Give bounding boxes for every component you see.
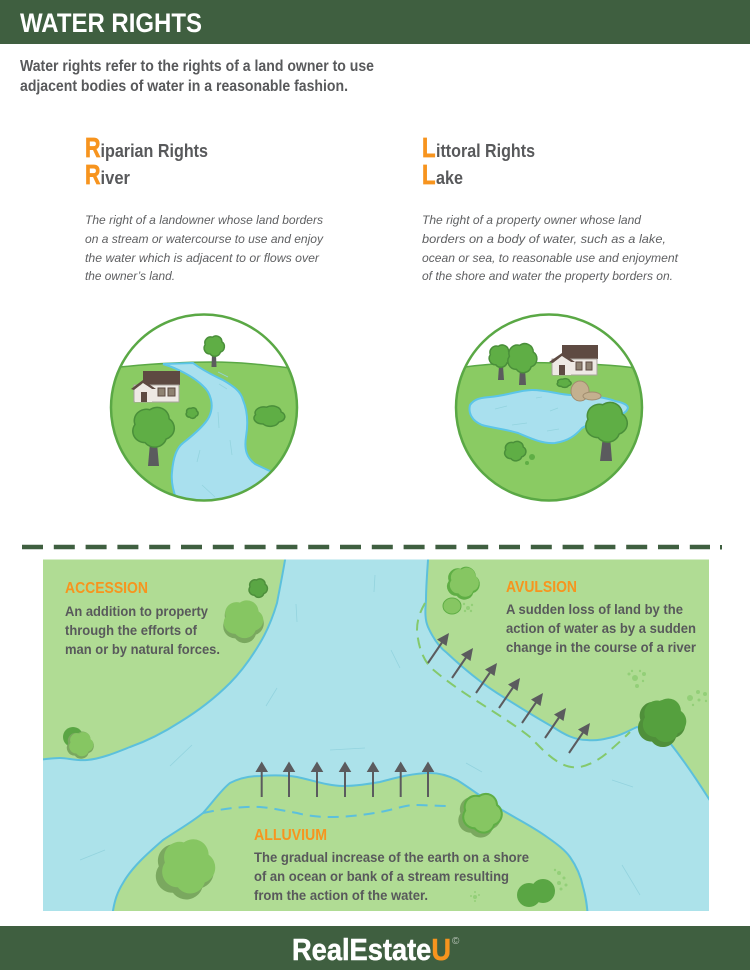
footer banner [0, 926, 750, 970]
littoral definition [422, 213, 679, 283]
littoral definition: of the shore and water the property borders on. [422, 269, 673, 283]
intro text [20, 58, 374, 95]
tree: hill [204, 336, 224, 367]
intro text: Water rights refer to the rights of a land owner to use [20, 58, 374, 75]
label: alluvium [254, 827, 529, 903]
tree: back centre [508, 344, 537, 385]
heading: littoral rights: L [422, 132, 436, 163]
label: alluvium: The gradual increase of the earth on a shore [254, 849, 529, 865]
label: accession [65, 580, 220, 657]
lake [470, 390, 628, 443]
bush: right [254, 406, 285, 426]
littoral definition: ocean or sea, to reasonable use and enjoyment [422, 251, 679, 265]
header banner [0, 0, 750, 44]
label: accession: man or by natural forces. [65, 641, 220, 657]
heading: riparian rights: iver [100, 168, 130, 188]
tree: avulsion top [443, 567, 480, 614]
heading: riparian rights: R [85, 159, 100, 190]
tree: back left [489, 345, 511, 380]
land: alluvium [112, 773, 588, 918]
illustration: river scene [110, 313, 298, 502]
label: avulsion: change in the course of a river [506, 639, 697, 655]
heading: riparian rights: R [85, 132, 100, 163]
tree: accession top small [249, 579, 267, 597]
intro text: adjacent bodies of water in a reasonable fashion. [20, 78, 348, 95]
house [131, 371, 180, 402]
tree: avulsion large [638, 699, 686, 747]
land: accession [36, 555, 286, 760]
bush: foreground [505, 441, 535, 465]
littoral definition: borders on a body of water, such as a lake, [422, 232, 666, 246]
arrows: avulsion [428, 633, 590, 753]
dots: avulsion [463, 603, 707, 706]
bush: small [186, 408, 198, 418]
water ripples [80, 575, 640, 895]
bush: alluvium bottom [517, 879, 555, 907]
label: accession: An addition to property [65, 603, 208, 619]
bush: by house [557, 379, 571, 387]
littoral definition: The right of a property owner whose land [422, 213, 641, 227]
label: avulsion: AVULSION [506, 579, 577, 596]
tree: large [133, 407, 174, 466]
heading: riparian rights [85, 132, 208, 190]
riparian definition [85, 213, 324, 283]
label: avulsion: action of water as by a sudden [506, 620, 696, 636]
label: avulsion [506, 579, 697, 655]
tree: alluvium right [458, 794, 502, 838]
tree: accession left [63, 727, 94, 759]
label: alluvium: from the action of the water. [254, 887, 428, 903]
heading: littoral rights: ake [436, 168, 463, 188]
label: accession: through the efforts of [65, 622, 197, 638]
label: alluvium: ALLUVIUM [254, 827, 327, 844]
title: WATER RIGHTS [20, 8, 202, 38]
heading: littoral rights: ittoral Rights [436, 141, 535, 161]
tree: foreground [586, 402, 627, 461]
label: accession: ACCESSION [65, 580, 148, 597]
dashed former bank: alluvium [203, 805, 450, 817]
heading: littoral rights [422, 132, 535, 190]
rocks [571, 381, 601, 401]
heading: littoral rights: L [422, 159, 436, 190]
riparian definition: the water which is adjacent to or flows over [85, 251, 320, 265]
illustration: lake scene [454, 313, 644, 502]
label: avulsion: A sudden loss of land by the [506, 601, 683, 617]
tree: alluvium large [156, 839, 215, 899]
logo: RealEstateU [292, 932, 451, 967]
river [162, 362, 271, 500]
heading: riparian rights: iparian Rights [100, 141, 208, 161]
land: avulsion [425, 552, 716, 809]
panel: river map [36, 552, 716, 918]
tree: accession large [223, 600, 264, 643]
label: alluvium: of an ocean or bank of a stream resulting [254, 868, 509, 884]
riparian definition: on a stream or watercourse to use and enjoy [85, 232, 324, 246]
dashed former bank: avulsion [417, 603, 630, 767]
arrows: alluvium [255, 762, 434, 797]
dots: alluvium [470, 869, 568, 902]
riparian definition: The right of a landowner whose land borders [85, 213, 323, 227]
house [549, 345, 598, 375]
riparian definition: the owner’s land. [85, 269, 175, 283]
logo: © [452, 936, 460, 947]
